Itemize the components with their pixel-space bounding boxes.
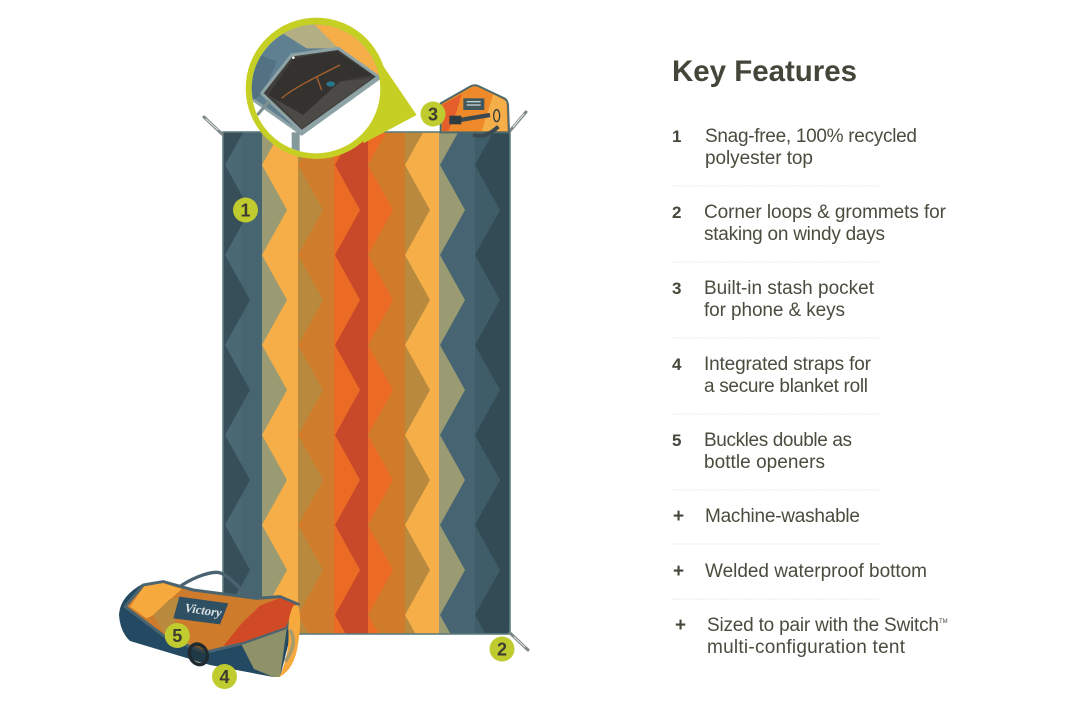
feature 1 [672,126,917,169]
feature 3: Built-in stash pocket [704,278,875,299]
badge 4: 4 [219,667,230,687]
badge 5: 5 [172,626,182,646]
feature 1: polyester top [705,148,813,169]
feature 1: 1 [672,127,681,146]
feature: sized for tent: multi-configuration tent [707,637,906,658]
feature 2: 2 [672,203,681,222]
badge 1: 1 [240,200,251,220]
feature 5: Buckles double as [704,430,852,451]
feature 5 [672,430,852,473]
patch label [173,597,228,624]
badge 3: 3 [428,104,438,124]
feature: sized for tent: + [675,615,686,636]
feature 2: Corner loops & grommets for [704,202,947,223]
feature: machine-washable: + [673,506,684,527]
rolled blanket [119,572,300,677]
feature 3: 3 [672,279,681,298]
feature 4: a secure blanket roll [704,376,868,397]
callout: stash pocket detail [246,18,417,159]
feature 4 [672,354,872,397]
badge 3 [420,102,446,126]
badge 1 [233,198,258,222]
feature 2: staking on windy days [704,224,885,245]
feature 1: Snag-free, 100% recycled [705,126,917,147]
feature 4: 4 [672,355,682,374]
feature 2 [672,202,947,245]
title: Key Features [672,55,857,88]
feature 5: bottle openers [704,452,825,473]
patch label: Victory [184,601,223,620]
feature: waterproof bottom: Welded waterproof bottom [705,561,927,582]
badge 5 [165,623,190,648]
feature: machine-washable: Machine-washable [705,506,860,527]
feature 3 [672,278,875,321]
stash pocket pouch [441,85,509,136]
feature 5: 5 [672,431,681,450]
corner loops [204,112,528,650]
badge 2 [490,636,514,662]
badge 2: 2 [497,640,507,660]
badge 4 [212,664,237,689]
feature: sized for tent [675,615,948,658]
feature: sized for tent: Sized to pair with the Switch [707,615,939,636]
feature 4: Integrated straps for [704,354,872,375]
feature 3: for phone & keys [704,300,845,321]
feature: sized for tent: TM [939,619,948,625]
feature: waterproof bottom: + [673,561,684,582]
blanket: unfolded zigzag pattern [222,131,511,635]
